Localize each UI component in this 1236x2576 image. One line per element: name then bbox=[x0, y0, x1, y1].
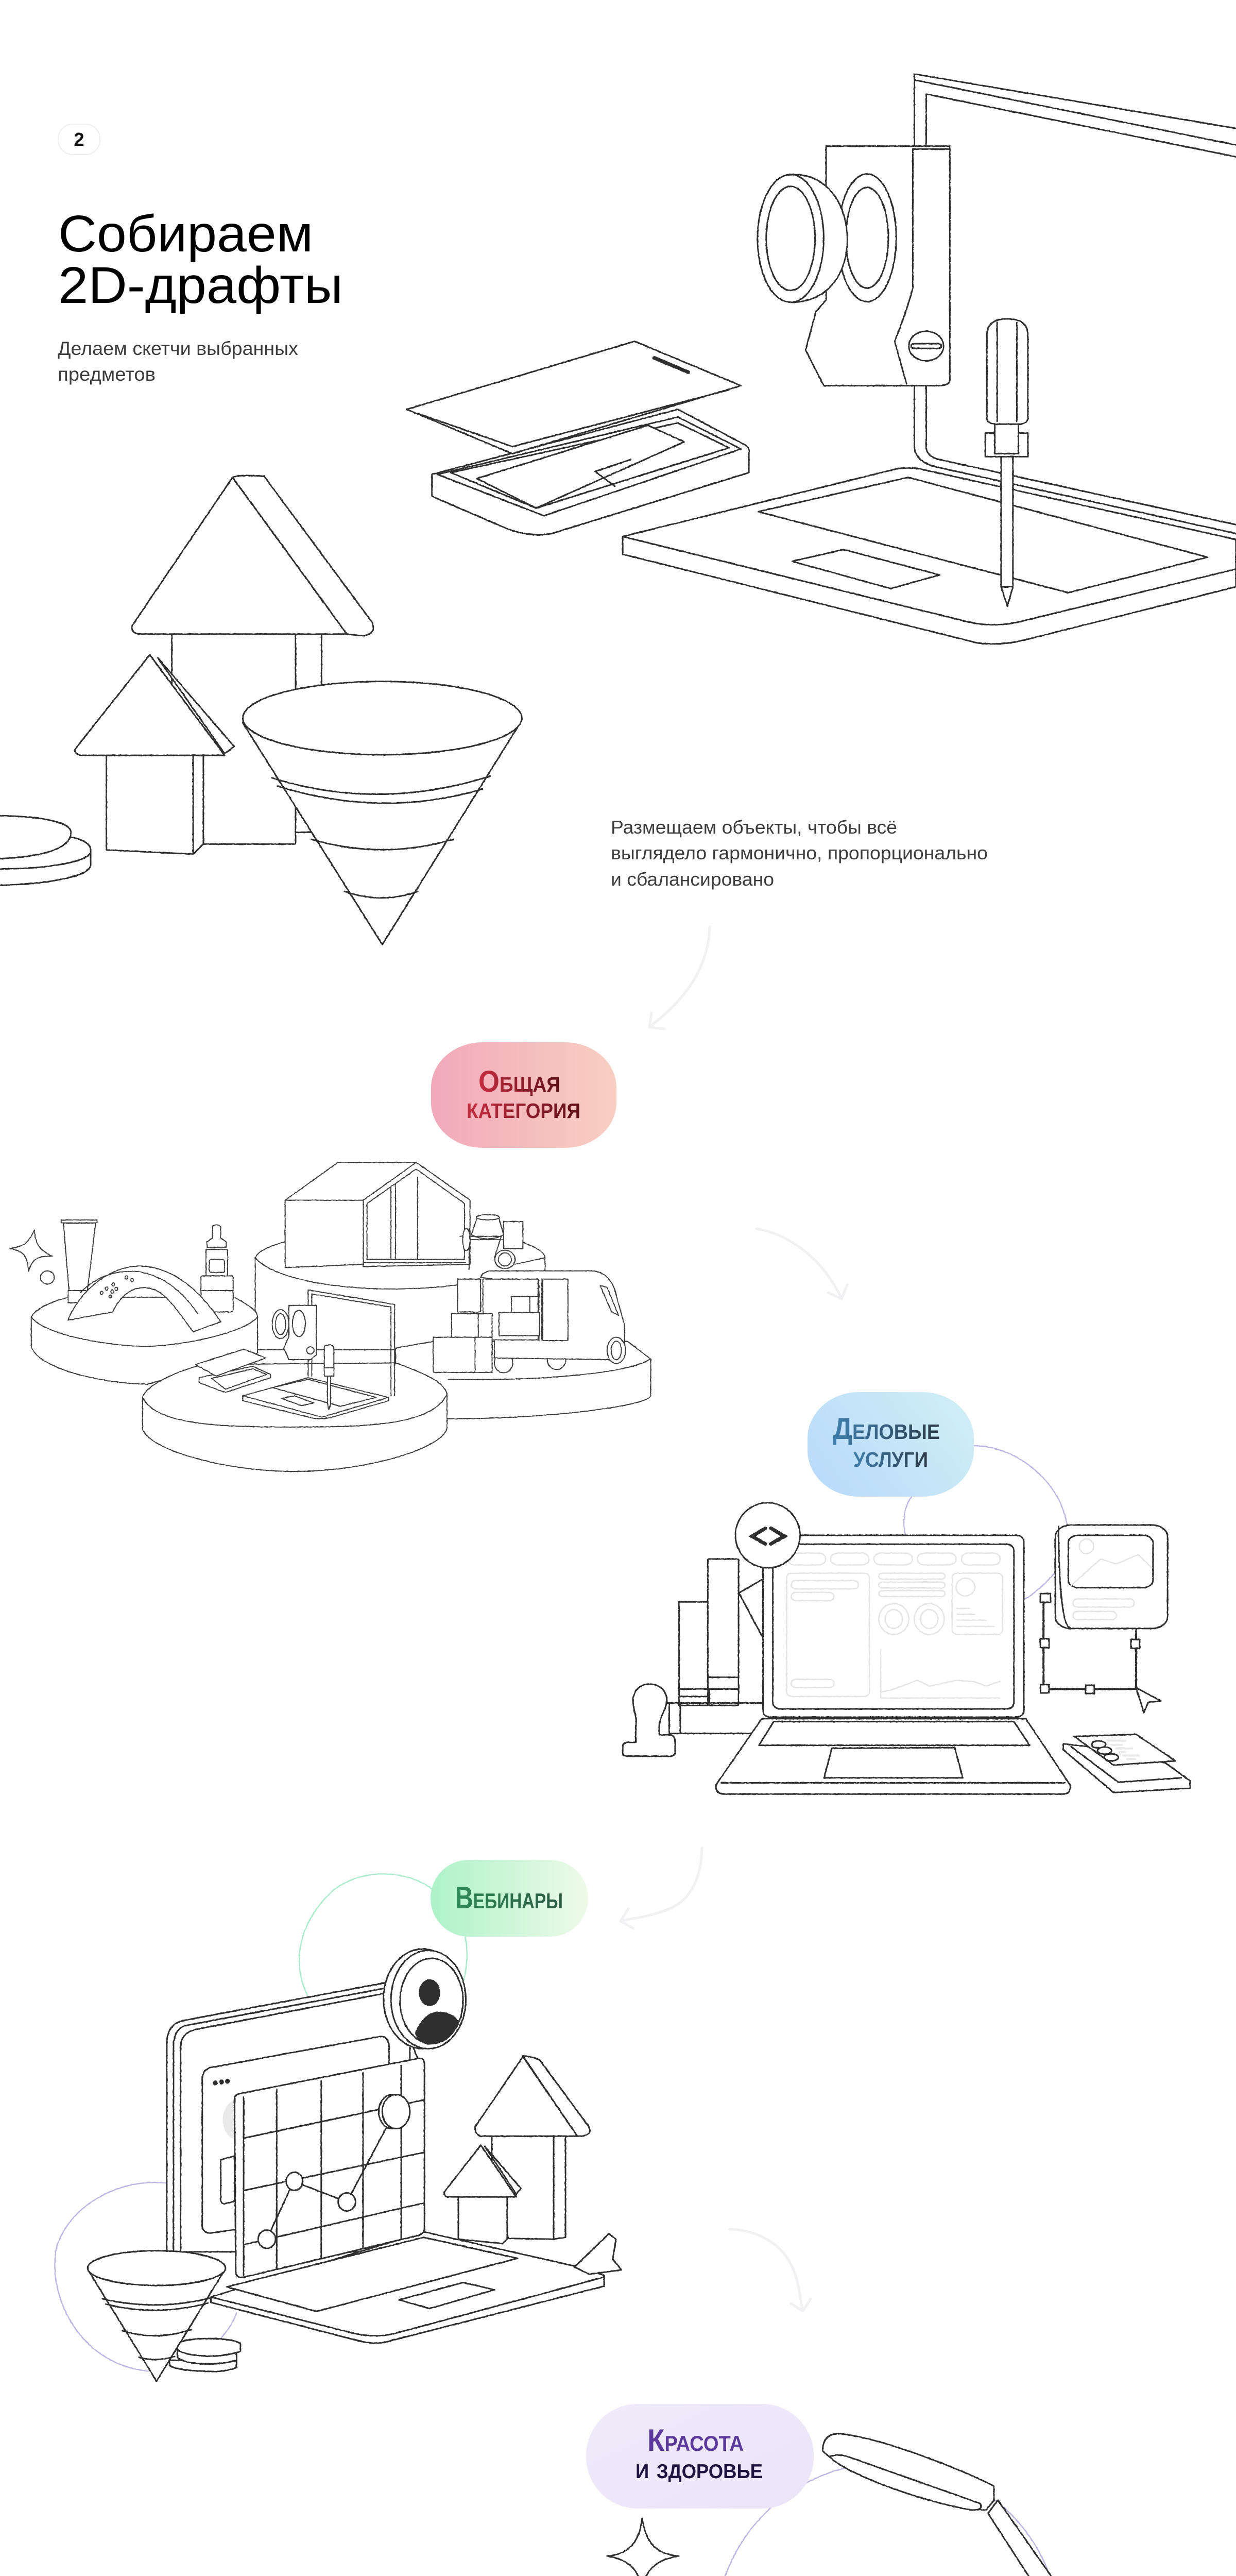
laptop screen frame bbox=[914, 74, 1236, 534]
small circle bbox=[41, 1271, 54, 1284]
mini laptop bbox=[243, 1290, 394, 1419]
folders bbox=[665, 1559, 763, 1734]
top platform bbox=[255, 1240, 545, 1350]
stacked boxes bbox=[433, 1279, 492, 1372]
placement text: выглядело гармонично, пропорционально bbox=[611, 842, 988, 863]
stamp bbox=[623, 1684, 675, 1756]
dashboard ui bbox=[786, 1553, 1003, 1698]
mini screwdriver bbox=[324, 1345, 334, 1410]
pill: business services: Деловые bbox=[833, 1412, 940, 1446]
pill: webinars: Вебинары bbox=[455, 1880, 563, 1915]
big up arrow bbox=[132, 476, 373, 844]
placement text: и сбалансировано bbox=[611, 869, 774, 890]
small up arrow bbox=[75, 655, 234, 854]
pill: beauty and health: и здоровье bbox=[636, 2452, 763, 2484]
arrow to beauty and health bbox=[730, 2229, 811, 2311]
laptop screen bbox=[763, 1535, 1024, 1717]
placement text: Размещаем объекты, чтобы всё bbox=[611, 817, 897, 838]
sparkle star bbox=[607, 2518, 679, 2576]
mini phone bbox=[196, 1349, 270, 1393]
pill: business services bbox=[808, 1392, 974, 1497]
illustration: beauty and health bbox=[575, 2433, 1144, 2576]
webcam avatar bbox=[384, 1949, 466, 2049]
step number badge: 2 bbox=[74, 129, 84, 150]
title: 2D-драфты bbox=[58, 257, 343, 314]
coins bbox=[169, 2338, 241, 2371]
illustration: general category scene bbox=[10, 1162, 651, 1471]
pill: beauty and health bbox=[586, 2404, 814, 2509]
purple circle bbox=[715, 2463, 1060, 2576]
cursor arrow bbox=[1136, 1688, 1161, 1713]
delivery van bbox=[480, 1271, 625, 1373]
subtitle text: предметов bbox=[58, 364, 156, 385]
pill: business services: услуги bbox=[853, 1440, 928, 1473]
code badge bbox=[735, 1503, 800, 1568]
laptop base bbox=[623, 468, 1236, 644]
paper plane bbox=[575, 2234, 622, 2274]
arrow to general category bbox=[649, 927, 710, 1029]
laptop screen bbox=[167, 1982, 418, 2252]
laptop base bbox=[716, 1719, 1070, 1794]
pill: beauty and health: Красота bbox=[647, 2423, 744, 2458]
laptop base bbox=[211, 2232, 604, 2343]
screwdriver bbox=[985, 319, 1028, 606]
phone lid bbox=[407, 342, 741, 454]
serum bottle and jar bbox=[201, 1225, 233, 1312]
sparkle star bbox=[10, 1230, 52, 1272]
beauty tube bbox=[61, 1220, 97, 1303]
mini camera bbox=[272, 1306, 316, 1360]
title: Собираем bbox=[58, 205, 313, 263]
coins stack bbox=[0, 816, 91, 886]
arrow to business services bbox=[757, 1229, 847, 1299]
pill: general category: категория bbox=[467, 1091, 580, 1125]
selection frame bbox=[1040, 1594, 1140, 1693]
lamp head bbox=[822, 2433, 994, 2510]
center platform bbox=[143, 1363, 447, 1471]
house bbox=[285, 1162, 470, 1267]
chart panel bbox=[234, 2058, 424, 2278]
pill: general category bbox=[431, 1042, 616, 1148]
small up arrow bbox=[444, 2145, 521, 2244]
illustration: sketch objects bbox=[0, 74, 1236, 944]
browser window bbox=[202, 2037, 389, 2233]
right platform bbox=[396, 1342, 651, 1419]
step number badge bbox=[58, 124, 100, 155]
left platform bbox=[31, 1297, 258, 1384]
phone case bbox=[432, 410, 749, 535]
nail lamp bbox=[68, 1266, 221, 1332]
illustration: webinars bbox=[55, 1874, 622, 2381]
illustration: business services bbox=[623, 1446, 1190, 1794]
pill: general category: Общая bbox=[478, 1065, 560, 1098]
connector lines bbox=[904, 1446, 1067, 1599]
green and purple circles bbox=[55, 1874, 467, 2371]
funnel cone bbox=[243, 682, 522, 944]
big up arrow bbox=[475, 2056, 590, 2239]
subtitle text: Делаем скетчи выбранных bbox=[58, 338, 298, 359]
concrete mixer bbox=[460, 1215, 523, 1269]
tablet mockup bbox=[1055, 1525, 1168, 1629]
camera lens and mount bbox=[758, 146, 950, 386]
business cards bbox=[1063, 1734, 1190, 1792]
pill: webinars bbox=[431, 1860, 588, 1937]
funnel cone bbox=[88, 2251, 226, 2381]
lamp arm bbox=[988, 2500, 1096, 2576]
arrow to webinars bbox=[621, 1848, 702, 1928]
